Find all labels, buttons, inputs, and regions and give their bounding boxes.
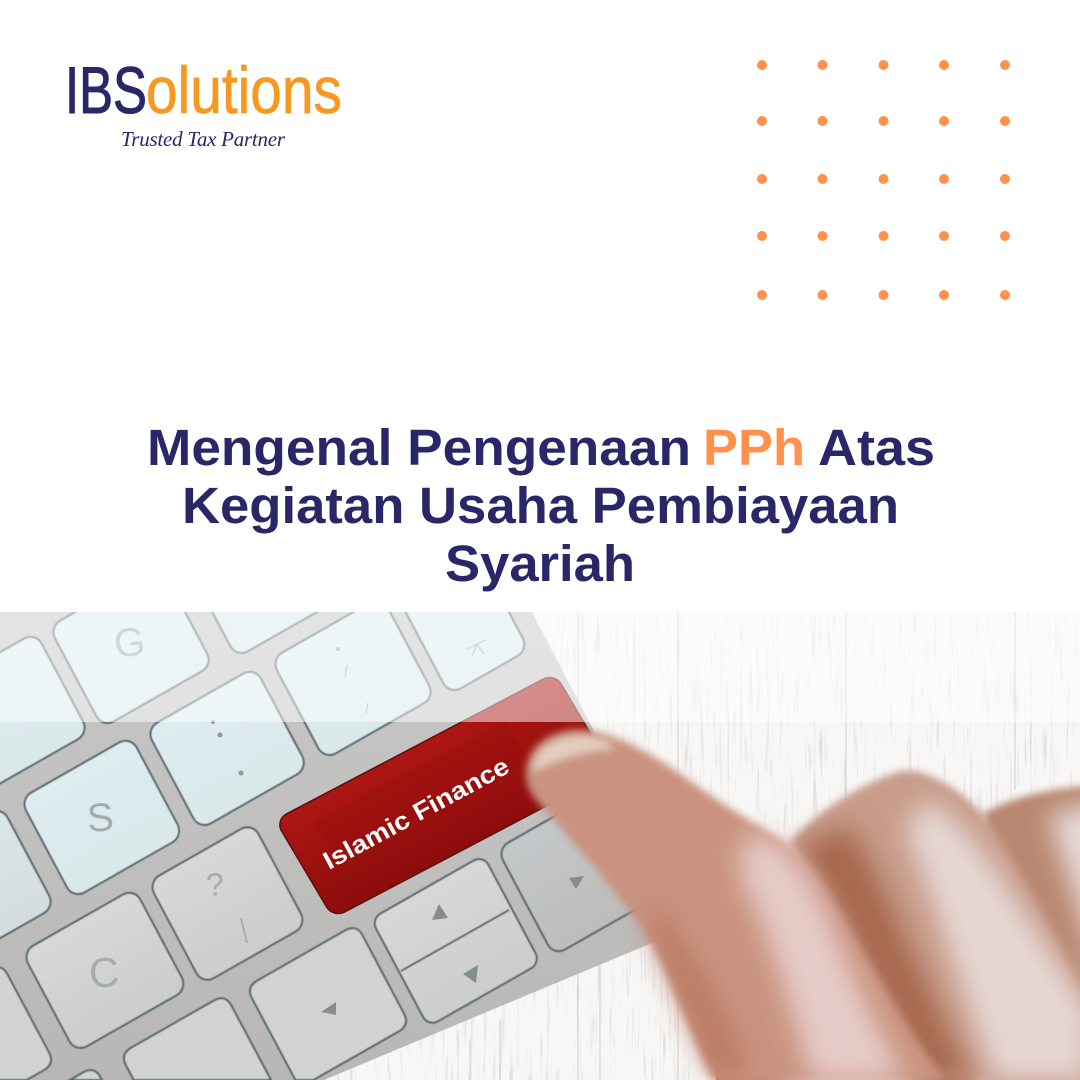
key legends: S <box>86 795 115 841</box>
title: Mengenal Pengenaan <box>147 419 691 476</box>
key legends: C <box>87 948 121 997</box>
title: Kegiatan Usaha Pembiayaan <box>182 477 899 534</box>
title <box>147 419 935 592</box>
fingernail <box>532 736 613 772</box>
key legends: ? <box>205 866 225 903</box>
hand base along bottom edge <box>716 1074 1000 1080</box>
title: Syariah <box>445 535 635 592</box>
title: Atas <box>818 419 935 476</box>
title: PPh <box>703 419 805 476</box>
logo <box>65 53 342 151</box>
logo tagline: Trusted Tax Partner <box>121 127 286 151</box>
index finger <box>526 729 945 1080</box>
keyboard keys <box>0 612 635 1080</box>
red key: Islamic Finance <box>275 673 613 918</box>
hand: blurred fingers <box>526 729 1080 1080</box>
ring finger <box>984 786 1080 1080</box>
red key: Islamic Finance: Islamic Finance <box>319 752 514 875</box>
logo wordmark: IBS <box>65 53 147 127</box>
wood background <box>325 612 1080 1080</box>
logo wordmark <box>65 53 342 127</box>
key legends <box>86 620 584 1015</box>
key legends: G <box>113 620 147 666</box>
keyboard body <box>0 612 695 1080</box>
photo: finger pressing Islamic Finance key <box>0 612 1080 1080</box>
middle finger <box>790 771 1080 1080</box>
logo wordmark: olutions <box>146 53 342 127</box>
translucent white band <box>0 612 1080 722</box>
dot grid decoration <box>757 60 1010 300</box>
